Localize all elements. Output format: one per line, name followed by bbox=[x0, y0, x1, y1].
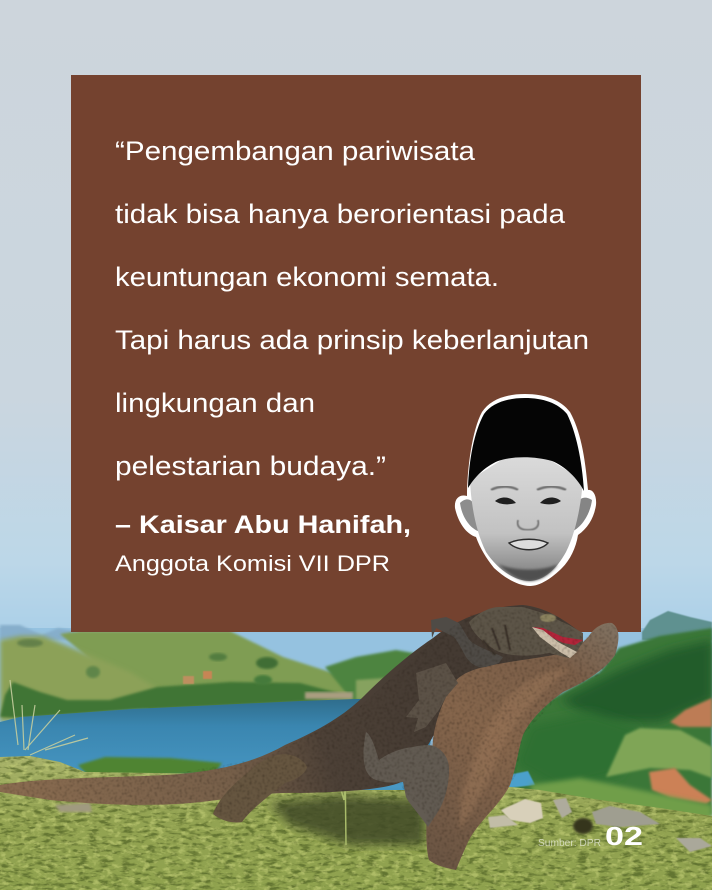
lake bbox=[0, 699, 440, 790]
background photo: landscape bbox=[0, 611, 712, 890]
upper komodo front leg with claws bbox=[406, 663, 458, 732]
grass blades bbox=[10, 680, 88, 755]
front left hill bbox=[0, 636, 160, 722]
lower komodo arm bbox=[363, 732, 449, 827]
chin shadow bbox=[498, 564, 558, 581]
upper komodo arm bbox=[431, 617, 503, 667]
background: sky bbox=[0, 0, 712, 640]
distant water bbox=[0, 628, 712, 780]
ears bbox=[460, 499, 481, 532]
rocks bbox=[501, 799, 543, 823]
neck wrinkles bbox=[483, 625, 510, 655]
attribution name: – Kaisar Abu Hanifah, bbox=[115, 511, 411, 539]
grassy knoll right bbox=[606, 728, 712, 778]
komodo dragons bbox=[0, 600, 625, 875]
source label: Sumber: DPR bbox=[538, 838, 601, 849]
lower komodo belly highlight bbox=[460, 668, 570, 830]
mouth bbox=[509, 539, 548, 550]
far shore bushes bbox=[78, 757, 222, 778]
quote text: keuntungan ekonomi semata. bbox=[115, 262, 499, 292]
quote text: tidak bisa hanya berorientasi pada bbox=[115, 199, 566, 229]
quote text: pelestarian budaya.” bbox=[115, 451, 386, 481]
white outline bbox=[455, 394, 596, 586]
grass texture bbox=[0, 755, 712, 890]
upper komodo back leg bbox=[213, 754, 307, 823]
panel: quote bbox=[71, 75, 641, 632]
small blue water patch bbox=[508, 771, 535, 788]
portrait sticker bbox=[455, 394, 596, 586]
scale texture bbox=[0, 600, 625, 875]
mouth bbox=[532, 627, 583, 645]
back hill bbox=[60, 631, 360, 710]
page number: 02 bbox=[605, 821, 643, 851]
nose bbox=[518, 520, 538, 530]
upper komodo head bbox=[469, 607, 583, 658]
distant hills left bbox=[0, 625, 75, 640]
lower komodo body bbox=[426, 623, 618, 870]
foreground grass bbox=[0, 756, 712, 890]
orange soil patches bbox=[670, 698, 712, 727]
green hills right bbox=[495, 628, 712, 815]
hat bbox=[468, 398, 584, 491]
green slope behind rocks bbox=[530, 778, 712, 825]
eyes and brows bbox=[491, 487, 566, 490]
quote text: lingkungan dan bbox=[115, 388, 315, 418]
distant mountain right bbox=[642, 611, 712, 640]
quote text bbox=[115, 136, 589, 481]
face bbox=[470, 445, 583, 581]
tree line along shore bbox=[0, 682, 353, 718]
hill shrubs bbox=[256, 657, 278, 669]
quote text: Tapi harus ada prinsip keberlanjutan bbox=[115, 325, 589, 355]
upper komodo tail and body bbox=[0, 605, 583, 805]
shadow under komodo bbox=[268, 795, 425, 845]
second hill behind komodo bbox=[325, 650, 425, 705]
quote text: “Pengembangan pariwisata bbox=[115, 136, 476, 166]
attribution role: Anggota Komisi VII DPR bbox=[115, 551, 390, 576]
eye patch bbox=[540, 614, 556, 622]
